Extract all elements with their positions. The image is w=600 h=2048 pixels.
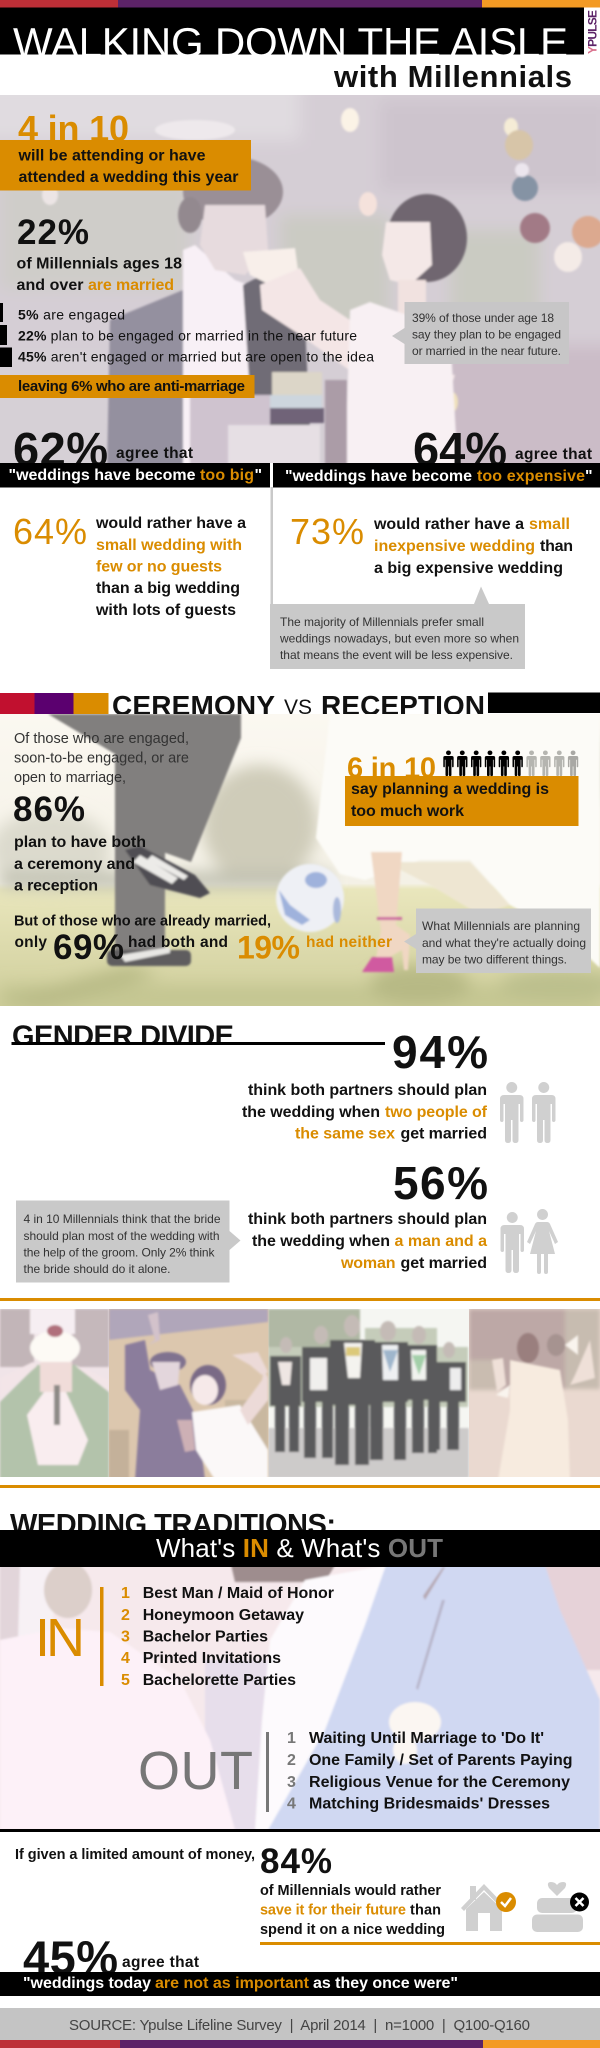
stat: 64% prefer small wedding (13, 511, 246, 619)
title banner: WALKING DOWN THE AISLE (13, 19, 568, 66)
stat: 4 in 10 attend weddings (0, 108, 251, 190)
icon: wedding cake with X (532, 1882, 589, 1932)
stat: 56% man and woman: 56% (393, 1157, 488, 1209)
stat: 62% too big: too big (200, 467, 254, 484)
callout: small weddings: that means the event will be less expensive. (280, 648, 513, 662)
stat: 22% married: 22% (17, 213, 89, 252)
stat: 22% married: are married (88, 277, 174, 294)
callout: anti-marriage (0, 375, 254, 398)
stat: 64% prefer small wedding: small wedding with (96, 537, 242, 554)
marital status list with bars: 45% aren't engaged or married but are open to the idea (18, 348, 374, 364)
stat: 73% prefer inexpensive wedding: a big expensive wedding (374, 560, 563, 577)
panel: what's out: Matching Bridesmaids' Dresses (309, 1796, 550, 1812)
icon: house with check (461, 1884, 516, 1931)
stat: 94% same sex: 94% (392, 1026, 488, 1078)
photo: bride with bouquet (0, 1309, 109, 1480)
heading: wedding traditions: What's IN & What's OUT (156, 1533, 443, 1563)
stat: 84% save for future: spend it on a nice wedding (260, 1922, 445, 1938)
heading: ceremony vs reception: RECEPTION (321, 690, 485, 721)
stat: 56% man and woman: think both partners should plan (248, 1211, 487, 1228)
panel: what's out: One Family / Set of Parents Paying (309, 1752, 572, 1769)
panel: what's in: 4 (121, 1650, 130, 1667)
text: ceremony and reception plans: a reception (14, 878, 98, 894)
callout: bride should plan: 4 in 10 Millennials think that the bride (24, 1212, 221, 1226)
stat: 73% prefer inexpensive wedding: 73% (290, 511, 364, 552)
stat: 45% not as important: agree that (122, 1954, 199, 1971)
panel: what's in: Bachelor Parties (143, 1628, 268, 1646)
subtitle: with Millennials (333, 59, 572, 94)
panel: what's in: Best Man / Maid of Honor (143, 1585, 334, 1602)
panel: what's out: 3 (287, 1774, 296, 1791)
callout: bride should plan: the help of the groom. Only 2% think (24, 1246, 216, 1260)
stat: 62% too big: "weddings have become (8, 467, 196, 484)
logo: Ypulse: YPULSE (586, 10, 600, 54)
stat: 64% prefer small wedding: few or no guests (96, 558, 222, 576)
stat: 73% prefer inexpensive wedding: inexpensive wedding (374, 538, 535, 555)
stat: 56% man and woman: the wedding when (252, 1233, 390, 1250)
marital status list with bars (0, 303, 374, 367)
footer: source: SOURCE: Ypulse Lifeline Survey | April 2014 | n=1000 | Q100-Q160 (69, 2017, 530, 2034)
text: ceremony and reception plans: a ceremony and (14, 856, 135, 873)
stat: 84% save for future: 84% (260, 1842, 332, 1881)
callout: planning vs doing: What Millennials are planning (422, 919, 580, 933)
groomsmen figures (270, 1340, 466, 1465)
heading: ceremony vs reception: VS (284, 696, 312, 719)
stat: 94% same sex: get married (400, 1126, 487, 1142)
photo: soccer ball wedding (0, 714, 600, 1010)
callout: under 18: 39% of those under age 18 (412, 311, 554, 325)
marital status list with bars: 22% plan to be engaged or married in the near future (18, 328, 357, 344)
text: already married stats: had both and (128, 934, 228, 951)
callout: planning vs doing: may be two different things. (422, 952, 567, 966)
stat: 56% man and woman (248, 1157, 488, 1272)
stat: 84% save for future (15, 1842, 600, 1945)
panel: what's out: Religious Venue for the Ceremony (309, 1774, 570, 1791)
panel: what's out: 1 (287, 1730, 296, 1747)
panel: what's in: 5 (121, 1672, 130, 1689)
stat: 73% prefer inexpensive wedding (290, 511, 573, 577)
stat: 64% prefer small wedding: than a big wedding (96, 580, 240, 597)
heading: ceremony vs reception (0, 690, 600, 721)
text: already married stats (14, 914, 392, 967)
photo: couple feeding cake (0, 80, 600, 480)
divider (270, 487, 273, 605)
stat: 45% not as important (0, 1931, 600, 1996)
panel: what's in: Bachelorette Parties (143, 1672, 296, 1689)
callout: anti-marriage: leaving 6% who are anti-marriage (18, 378, 245, 395)
heading: ceremony vs reception: CEREMONY (112, 690, 275, 721)
text: ceremony and reception plans: plan to have both (14, 834, 146, 851)
footer: source (0, 2008, 600, 2048)
marital status list with bars: 5% are engaged (18, 306, 125, 322)
heading: gender divide (0, 1020, 385, 1052)
callout: planning vs doing (404, 908, 591, 973)
stat: 84% save for future: of Millennials would rather (260, 1883, 441, 1899)
heading: gender divide: GENDER DIVIDE (12, 1020, 234, 1052)
text: ceremony and reception plans: open to marriage, (14, 770, 126, 786)
stat: 6 in 10 too much work: 6 in 10 (347, 752, 436, 784)
text: ceremony and reception plans: soon-to-be engaged, or are (14, 750, 189, 766)
text: already married stats: But of those who are already married, (14, 914, 271, 930)
panel: what's in: 1 (121, 1585, 130, 1602)
callout: bride should plan: the bride should do it alone. (24, 1262, 170, 1276)
stat: 73% prefer inexpensive wedding: would rather have a (373, 516, 524, 533)
icon: man and woman (500, 1209, 558, 1274)
stat: 64% prefer small wedding: 64% (13, 511, 87, 552)
stat: 45% not as important: "weddings today (23, 1975, 151, 1992)
callout: planning vs doing: and what they're actually doing (422, 936, 586, 950)
text: already married stats: only (14, 934, 47, 951)
stat: 94% same sex: two people of (385, 1104, 488, 1121)
panel: what's out: OUT (138, 1741, 253, 1801)
stat: 45% not as important: 45% (23, 1931, 118, 1984)
stat: 62% too big: 62% (13, 422, 108, 476)
stat: 64% too expensive (273, 422, 600, 488)
stat: 94% same sex: the wedding when (242, 1104, 380, 1121)
panel: what's in (35, 1585, 334, 1689)
panel: what's out (138, 1730, 572, 1812)
stat: 73% prefer inexpensive wedding: than (540, 538, 573, 555)
panel: what's in: 2 (121, 1607, 130, 1624)
stat: 62% too big (0, 422, 270, 488)
stat: 94% same sex (242, 1026, 488, 1142)
panel: what's out: 2 (287, 1752, 296, 1769)
icon: two men (500, 1082, 556, 1143)
panel: what's in: Honeymoon Getaway (143, 1607, 304, 1624)
title banner (0, 0, 600, 66)
stat: 6 in 10 too much work: say planning a wedding is (351, 781, 549, 798)
stat: 6 in 10 too much work: too much work (351, 803, 464, 820)
text: ceremony and reception plans (13, 731, 189, 894)
panel: what's in: IN (35, 1608, 85, 1668)
stat: 62% too big: " (254, 467, 262, 484)
text: ceremony and reception plans: 86% (13, 790, 85, 829)
stat: 4 in 10 attend weddings: 4 in 10 (18, 108, 129, 149)
stat: 64% too expensive: 64% (413, 422, 507, 476)
stat: 64% too expensive: " (585, 468, 593, 485)
callout: under 18: or married in the near future. (412, 344, 561, 358)
heading: wedding traditions: WEDDING TRADITIONS: (10, 1509, 336, 1541)
callout: small weddings: The majority of Millennials prefer small (280, 615, 484, 629)
text: already married stats: had neither (306, 934, 392, 951)
stat: 56% man and woman: woman (340, 1255, 396, 1272)
photo: two brides with bunting (469, 1309, 600, 1480)
stat: 73% prefer inexpensive wedding: small (529, 516, 570, 533)
text: ceremony and reception plans: Of those who are engaged, (14, 731, 189, 747)
stat: 6 in 10 too much work (345, 752, 578, 826)
stat: 64% too expensive: agree that (515, 446, 592, 463)
callout: under 18 (392, 302, 569, 364)
callout: small weddings: weddings nowadays, but even more so when (279, 632, 519, 646)
stat: 84% save for future: than (410, 1902, 441, 1918)
stat: 45% not as important: as they once were" (313, 1975, 458, 1992)
stat: 4 in 10 attend weddings: attended a wedding this year (18, 169, 238, 186)
stat: 64% prefer small wedding: would rather have a (95, 515, 246, 532)
stat: 62% too big: agree that (116, 445, 193, 462)
photo: bride and groom (0, 1560, 600, 1835)
panel: what's in: 3 (121, 1628, 130, 1646)
callout: bride should plan: should plan most of the wedding with (24, 1229, 220, 1243)
stat: 22% married (16, 213, 182, 294)
icon: ten people, six highlighted (443, 750, 578, 776)
stat: 84% save for future: save it for their future (260, 1902, 406, 1918)
text: already married stats: 19% (237, 930, 300, 966)
stat: 56% man and woman: a man and a (394, 1233, 487, 1250)
stat: 64% too expensive: too expensive (477, 468, 585, 485)
callout: small weddings (270, 586, 525, 669)
soccer ball (276, 864, 344, 932)
stat: 64% prefer small wedding: with lots of guests (95, 602, 236, 619)
photo: couple with raised arms (109, 1309, 269, 1480)
stat: 94% same sex: think both partners should plan (248, 1082, 487, 1099)
panel: what's out: 4 (287, 1796, 296, 1812)
callout: bride should plan (16, 1200, 240, 1282)
heading: wedding traditions (0, 1509, 600, 1567)
stat: 56% man and woman: get married (400, 1255, 487, 1272)
stat: 45% not as important: are not as important (155, 1975, 310, 1992)
panel: what's in: Printed Invitations (143, 1650, 281, 1667)
callout: under 18: say they plan to be engaged (412, 328, 561, 342)
stat: 22% married: of Millennials ages 18 (16, 256, 182, 272)
stat: 84% save for future: If given a limited amount of money, (15, 1847, 255, 1863)
stat: 4 in 10 attend weddings: will be attending or have (18, 148, 206, 164)
stat: 64% too expensive: "weddings have become (285, 468, 472, 485)
panel: what's out: Waiting Until Marriage to 'Do It' (309, 1730, 544, 1747)
text: already married stats: 69% (53, 928, 124, 967)
stat: 22% married: and over (16, 277, 84, 294)
photo: groomsmen superheroes (268, 1309, 469, 1478)
stat: 94% same sex: the same sex (295, 1126, 395, 1142)
